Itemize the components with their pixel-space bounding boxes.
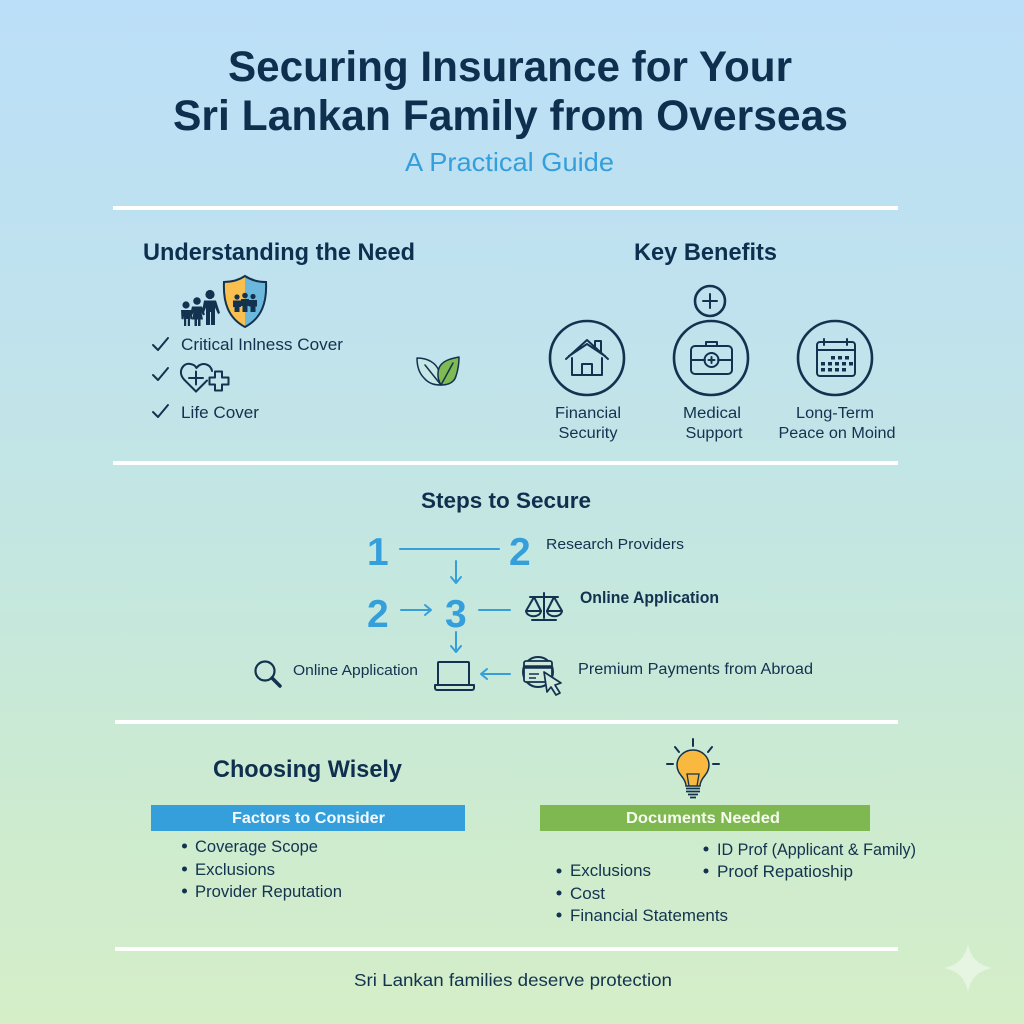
title [173,43,848,140]
banner: factors to consider: Factors to Consider [232,810,385,827]
connector [400,548,499,550]
list: documents left: Financial Statements [570,907,728,925]
panel: key benefits [550,239,896,442]
item: life cover: Life Cover [181,404,260,422]
icon: laptop [435,662,474,690]
step label: premium payments: Premium Payments from Abroad [578,661,813,678]
panel: understanding the need [143,239,459,422]
benefit: medical support [674,321,748,442]
icon: house [566,340,608,375]
icon: check [153,405,168,417]
banner: factors to consider [151,805,465,831]
arrow left [481,669,510,679]
benefit: financial security [550,321,624,442]
list: documents left: Cost [570,885,605,903]
panel: steps to secure [256,488,813,695]
icon: check [153,338,168,350]
list: factors: Provider Reputation [195,883,342,901]
step label: online application: Online Application [293,662,418,679]
list: factors: Exclusions [195,861,275,879]
step label: research providers: Research Providers [546,536,684,553]
heading: understanding the need: Understanding the Need [143,239,415,266]
list: factors [182,838,342,901]
arrow down [451,632,461,652]
icon: check [153,368,168,380]
number 3: 3 [445,593,467,636]
number 2: 2 [509,531,531,574]
list: documents right: ID Prof (Applicant & Family) [717,841,916,859]
benefit: long-term peace of mind: Peace on Moind [778,425,896,442]
banner: documents needed [540,805,870,831]
icon: magnifier [256,662,280,686]
list: factors: Coverage Scope [195,838,318,856]
list: documents right: Proof Repatioship [717,863,853,881]
icon: calendar [817,339,855,376]
benefit: financial security: Financial [555,405,621,422]
arrow down [451,561,461,583]
footer text: Sri Lankan families deserve protection [354,970,672,990]
arrow right [401,605,431,615]
heading: steps to secure: Steps to Secure [421,488,591,513]
benefit: long-term peace of mind: Long-Term [796,405,874,422]
banner: documents needed: Documents Needed [626,810,780,827]
panel: choosing wisely [151,739,916,925]
number 2: 2 [367,593,389,636]
subtitle: A Practical Guide [405,147,614,177]
icon: family shield [224,276,266,327]
title: Securing Insurance for Your [228,43,792,91]
icon: scales [526,593,562,620]
benefit: long-term peace of mind [778,321,896,442]
icon: sparkle [944,944,992,992]
title: Sri Lankan Family from Overseas [173,92,848,140]
heading: key benefits: Key Benefits [634,239,777,266]
icon: card with cursor [523,657,561,695]
number 1: 1 [367,531,389,574]
item: critical illness cover: Critical Inlness Cover [181,336,344,354]
icon: medical case [691,342,732,374]
list: documents left [556,862,728,925]
icon: heart and cross [181,364,228,392]
benefit: medical support: Support [686,425,743,442]
step label: online application: Online Application [580,589,719,607]
icon: leaves [417,357,459,385]
list: documents right [704,841,916,881]
benefit: medical support: Medical [683,405,741,422]
icon: family [181,290,220,326]
icon: plus circle [695,286,725,316]
icon: light bulb [667,739,719,798]
heading: choosing wisely: Choosing Wisely [213,756,402,783]
connector [479,609,510,611]
list: documents left: Exclusions [570,862,651,880]
benefit: financial security: Security [558,425,618,442]
